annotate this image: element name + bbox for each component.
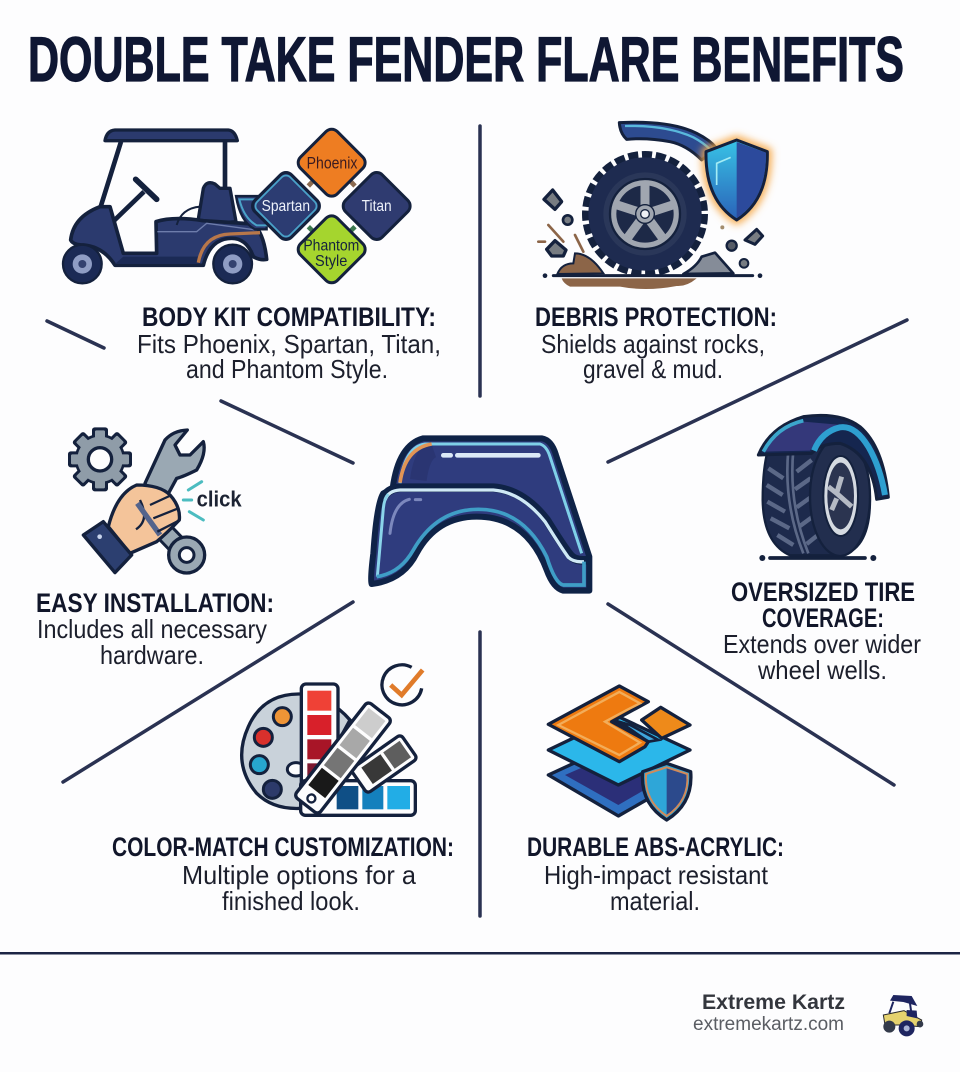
text: oversized tire coverage — [723, 577, 921, 685]
panel: debris protection — [535, 122, 777, 384]
diamond: Titan: Titan — [362, 198, 392, 215]
text: easy installation — [36, 588, 274, 670]
diamond: Phoenix: Phoenix — [307, 153, 358, 172]
text: debris protection: gravel & mud. — [583, 354, 723, 384]
text: body kit compatibility: BODY KIT COMPATIBILITY: — [142, 302, 436, 332]
text: debris protection: DEBRIS PROTECTION: — [535, 302, 777, 332]
diamond: Phoenix — [295, 126, 368, 199]
diamond: Spartan — [249, 169, 323, 243]
diamond: Titan — [340, 169, 413, 243]
text: durable abs-acrylic: High-impact resistant — [544, 860, 769, 890]
panel: easy installation — [36, 427, 274, 670]
icon: hand with wrench and gear — [68, 427, 242, 573]
panel: oversized tire coverage — [723, 415, 921, 685]
text: oversized tire coverage: wheel wells. — [757, 655, 887, 685]
text: oversized tire coverage: Extends over wider — [723, 629, 921, 659]
text: color-match customization: finished look. — [222, 886, 360, 916]
label: click: click — [197, 487, 242, 512]
icon: tire under fender — [758, 415, 888, 561]
icon: gear — [68, 427, 132, 491]
brand name: Extreme Kartz — [702, 991, 845, 1014]
central icon: fender flare — [371, 438, 589, 591]
diamond: Spartan: Spartan — [262, 198, 310, 215]
text: oversized tire coverage: OVERSIZED TIRE — [731, 577, 915, 607]
diamond: Phantom Style: Style — [315, 253, 347, 270]
icon: logo cart — [883, 995, 923, 1036]
text: body kit compatibility: Fits Phoenix, Spartan, Titan, — [137, 329, 441, 359]
panel: color-match customization — [112, 665, 454, 916]
icon: material layers with shield — [548, 686, 691, 820]
text: durable abs-acrylic: DURABLE ABS-ACRYLIC: — [527, 832, 784, 862]
icon: golf cart with body kit diamonds — [63, 126, 413, 286]
text: easy installation: Includes all necessary — [37, 614, 267, 644]
text: easy installation: EASY INSTALLATION: — [36, 588, 274, 618]
text: oversized tire coverage: COVERAGE: — [762, 603, 884, 633]
panel: body kit compatibility — [63, 126, 441, 384]
text: color-match customization — [112, 832, 454, 916]
diamond: Phantom Style — [295, 213, 368, 286]
text: durable abs-acrylic: material. — [610, 886, 700, 916]
radial divider lines — [47, 126, 907, 916]
footer brand — [693, 991, 923, 1036]
brand url: extremekartz.com — [693, 1014, 844, 1035]
text: easy installation: hardware. — [100, 640, 204, 670]
icon: palette and swatches — [242, 665, 423, 815]
text: debris protection: Shields against rocks, — [541, 329, 765, 359]
text: durable abs-acrylic — [527, 832, 784, 916]
diamond: Phantom Style: Phantom — [303, 238, 359, 255]
icon: tire with debris and shield — [538, 122, 767, 289]
text: color-match customization: Multiple options for a — [182, 860, 417, 890]
text: body kit compatibility — [137, 302, 441, 384]
text: debris protection — [535, 302, 777, 384]
panel: durable abs-acrylic — [527, 686, 784, 916]
text: body kit compatibility: and Phantom Style. — [186, 354, 388, 384]
text: color-match customization: COLOR-MATCH CUSTOMIZATION: — [112, 832, 454, 862]
